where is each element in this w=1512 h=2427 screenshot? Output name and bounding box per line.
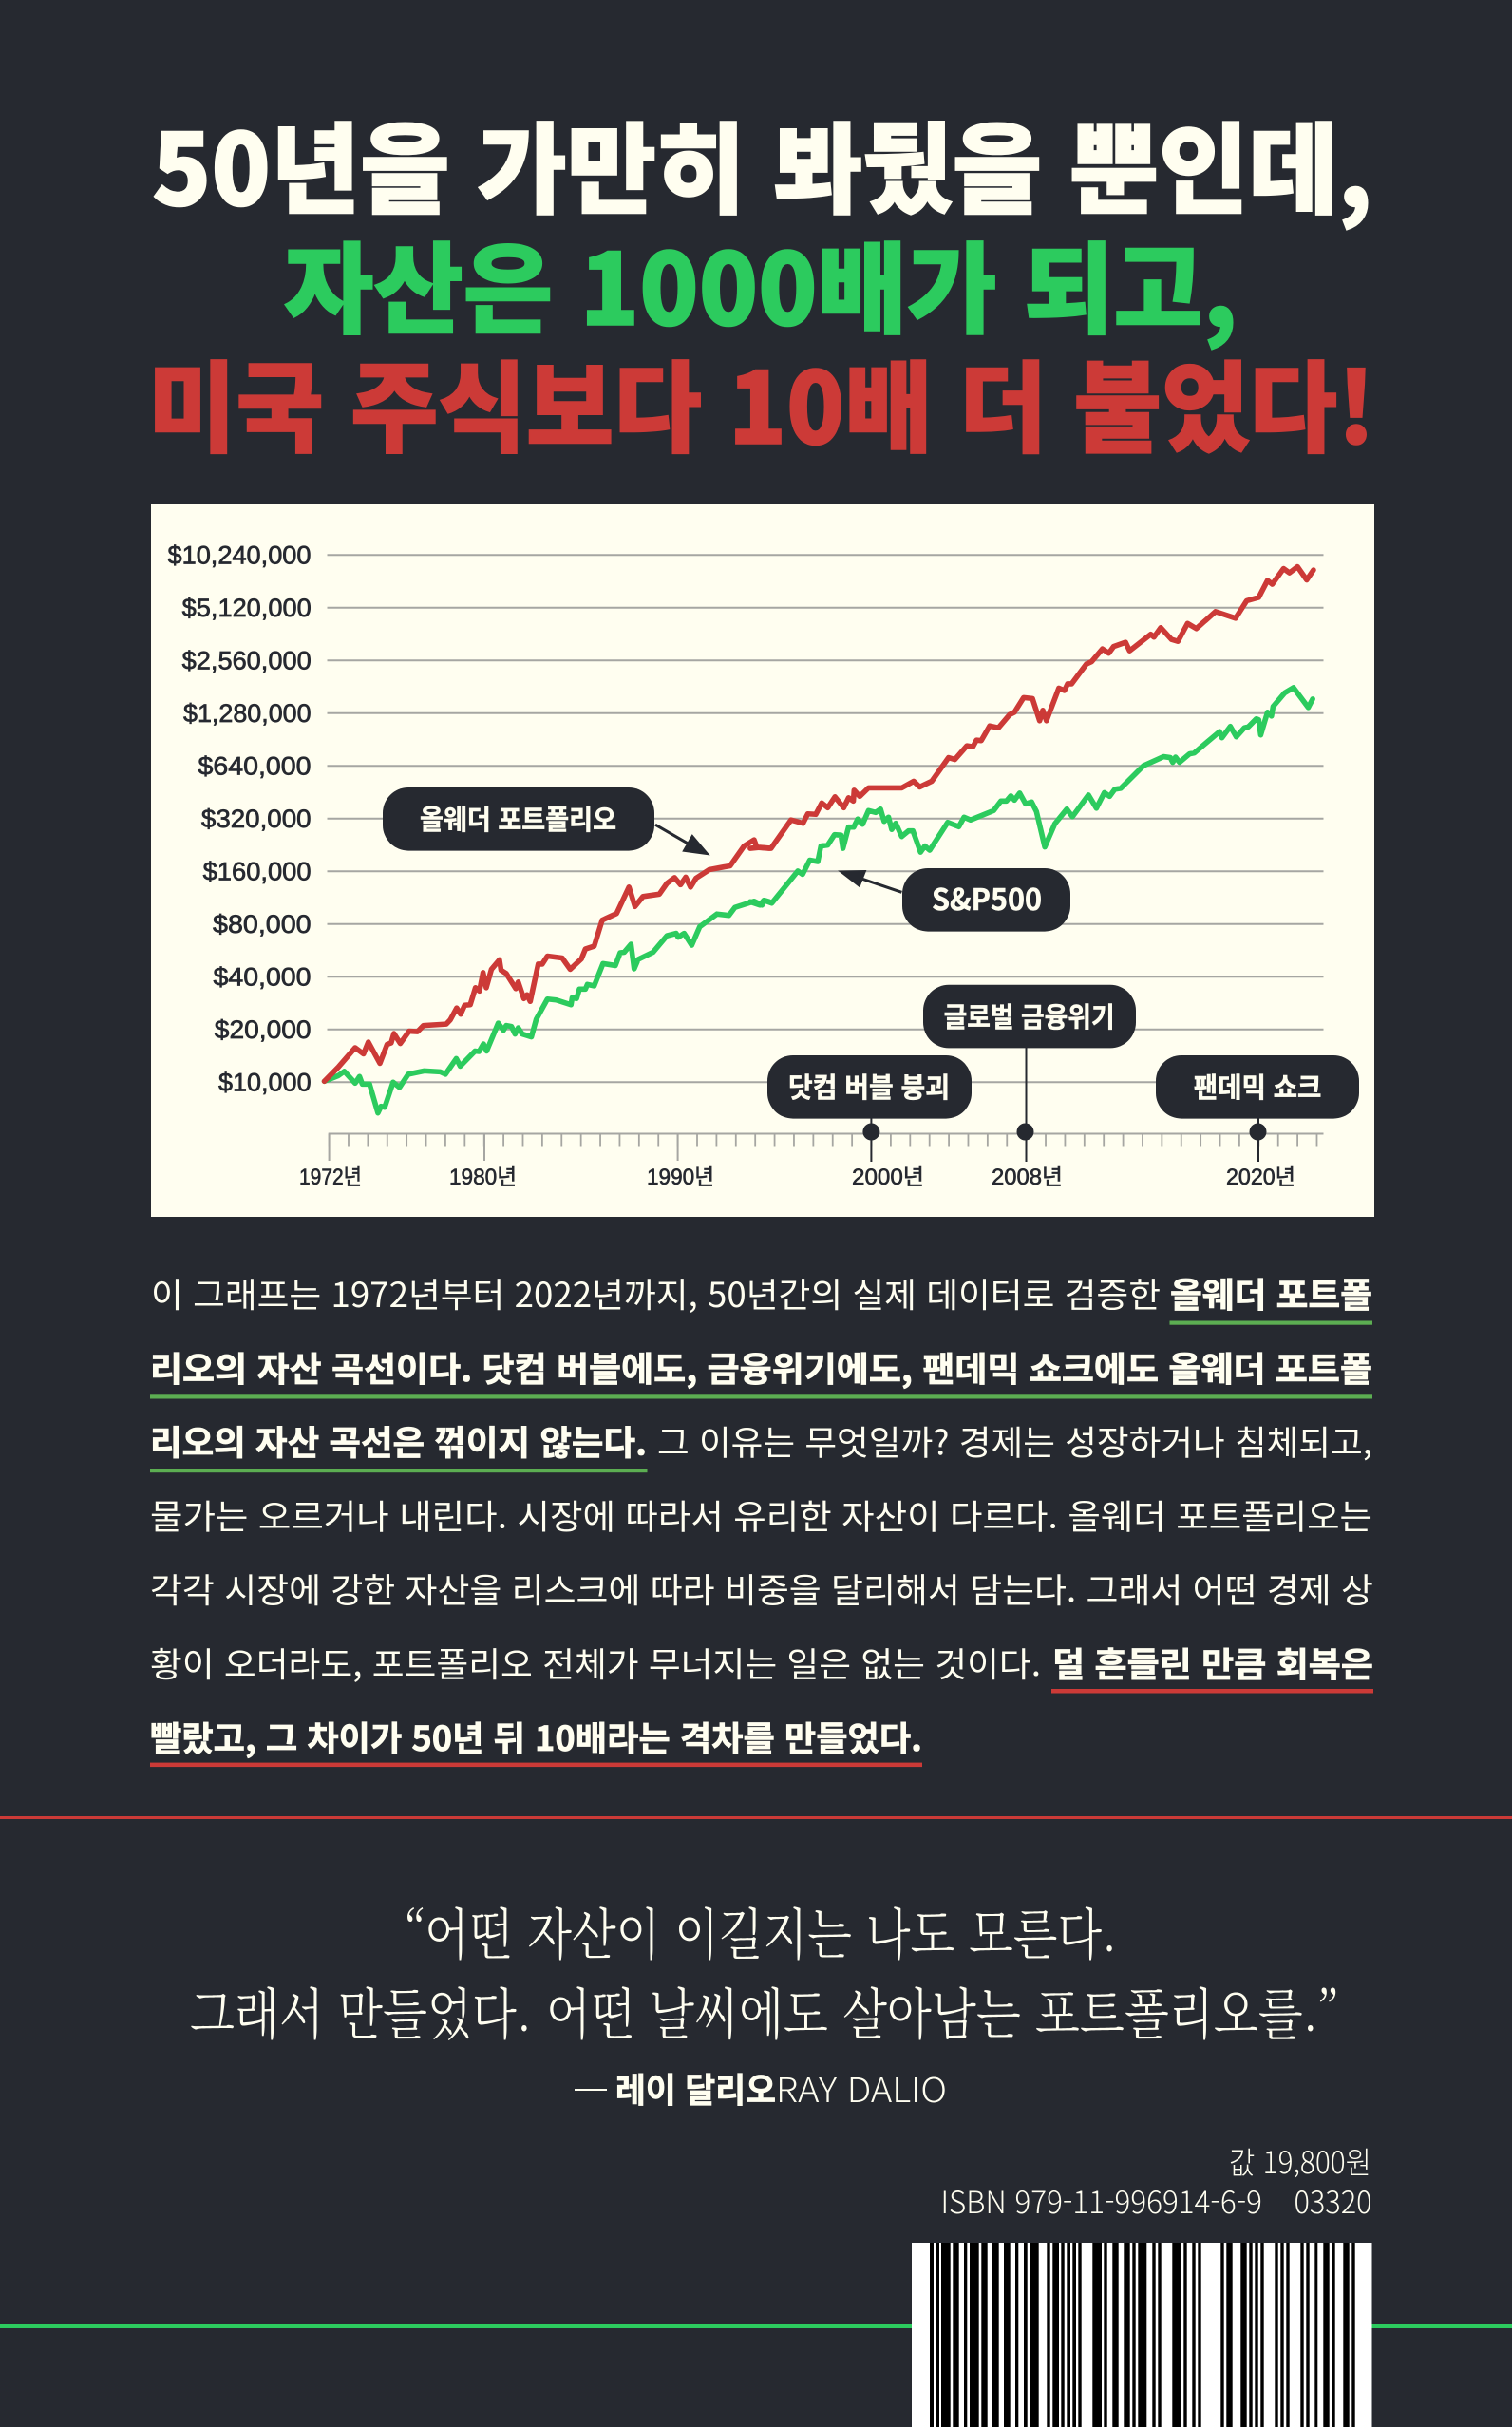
y-axis labels: $640,000 (198, 751, 312, 780)
attribution (575, 2063, 947, 2113)
marker: global financial crisis: 글로벌 금융위기 (944, 995, 1115, 1035)
body text (150, 1268, 1373, 1767)
paragraph lines: 빨랐고, 그 차이가 50년 뒤 10배라는 격차를 만들었다. (150, 1712, 922, 1761)
y-axis labels: $1,280,000 (183, 699, 312, 728)
paragraph lines: 올웨더 포트폴 (1170, 1268, 1372, 1318)
barcode (912, 2243, 1371, 2427)
paragraph lines: 리오의 자산 곡선이다. 닷컴 버블에도, 금융위기에도, 팬데믹 쇼크에도 올웨더 포트폴 (150, 1342, 1372, 1392)
arrow: all weather (655, 825, 710, 856)
title line 3: 미국 주식보다 10배 더 불었다! (148, 329, 1375, 472)
x-axis labels: 2000년 (852, 1165, 924, 1190)
y-axis labels: $2,560,000 (182, 646, 312, 674)
y-axis labels: $20,000 (215, 1015, 312, 1044)
title line 1: 50년을 가만히 봐뒀을 뿐인데, (152, 90, 1372, 234)
attribution: 레이 달리오 (615, 2063, 776, 2113)
title line 2: 자산은 1000배가 되고, (284, 210, 1238, 353)
x-axis labels: 1990년 (647, 1165, 714, 1190)
y-axis labels: $10,240,000 (167, 540, 312, 569)
green divider (0, 2324, 1512, 2328)
y-axis labels (167, 540, 312, 1096)
paragraph lines: 물가는 오르거나 내린다. 시장에 따라서 유리한 자산이 다르다. 올웨더 포트폴리오는 (150, 1489, 1372, 1539)
title (148, 90, 1375, 472)
isbn: ISBN 979-11-996914-6-9 (940, 2179, 1262, 2223)
x-axis labels (299, 1165, 1295, 1190)
x-axis labels: 2020년 (1226, 1165, 1295, 1190)
y-axis labels: $320,000 (201, 805, 312, 833)
paragraph lines: 덜 흔들린 만큼 회복은 (1052, 1638, 1373, 1687)
line: S&P500 green (325, 688, 1313, 1113)
attribution: RAY DALIO (776, 2063, 947, 2113)
label: S&P500: S&P500 (932, 876, 1042, 919)
underlines (150, 1320, 1373, 1767)
marker: dotcom bubble: 닷컴 버블 붕괴 (788, 1066, 950, 1106)
x-axis labels: 1980년 (449, 1165, 517, 1190)
divider: red (0, 1816, 1512, 1819)
quote (190, 1890, 1339, 2050)
paragraph lines: 리오의 자산 곡선은 꺾이지 않는다. (150, 1416, 647, 1466)
paragraph lines: 그 이유는 무엇일까? 경제는 성장하거나 침체되고, (657, 1416, 1372, 1466)
panel: growth chart (151, 504, 1374, 1217)
label: all weather portfolio (383, 787, 654, 851)
y-axis labels: $10,000 (218, 1068, 312, 1096)
marker: dotcom bubble (767, 1055, 972, 1162)
y-axis labels: $5,120,000 (182, 594, 312, 622)
label: S&P500 (902, 868, 1070, 932)
isbn: 03320 (1294, 2179, 1371, 2223)
y-axis labels: $80,000 (213, 910, 312, 939)
x-axis ruler (329, 1134, 1324, 1161)
price: 값 19,800원 (1229, 2139, 1371, 2183)
x-axis labels: 2008년 (992, 1165, 1063, 1190)
arrow: S&P500 (838, 870, 901, 892)
x-axis labels: 1972년 (299, 1165, 362, 1190)
marker: pandemic shock: 팬데믹 쇼크 (1194, 1066, 1321, 1106)
paragraph lines: 이 그래프는 1972년부터 2022년까지, 50년간의 실제 데이터로 검증한 (151, 1268, 1161, 1318)
quote: “어떤 자산이 이길지는 나도 모른다. (404, 1890, 1117, 1970)
marker: global financial crisis (923, 985, 1136, 1162)
label: all weather portfolio: 올웨더 포트폴리오 (420, 798, 616, 838)
paragraph lines: 황이 오더라도, 포트폴리오 전체가 무너지는 일은 없는 것이다. (150, 1638, 1041, 1687)
marker: pandemic shock (1156, 1055, 1359, 1162)
line: All Weather red (325, 567, 1314, 1081)
paragraph lines (150, 1268, 1373, 1761)
y-axis labels: $160,000 (203, 857, 312, 885)
paragraph lines: 각각 시장에 강한 자산을 리스크에 따라 비중을 달리해서 담는다. 그래서 어떤 경제 상 (150, 1564, 1373, 1613)
y-axis labels: $40,000 (213, 962, 312, 991)
